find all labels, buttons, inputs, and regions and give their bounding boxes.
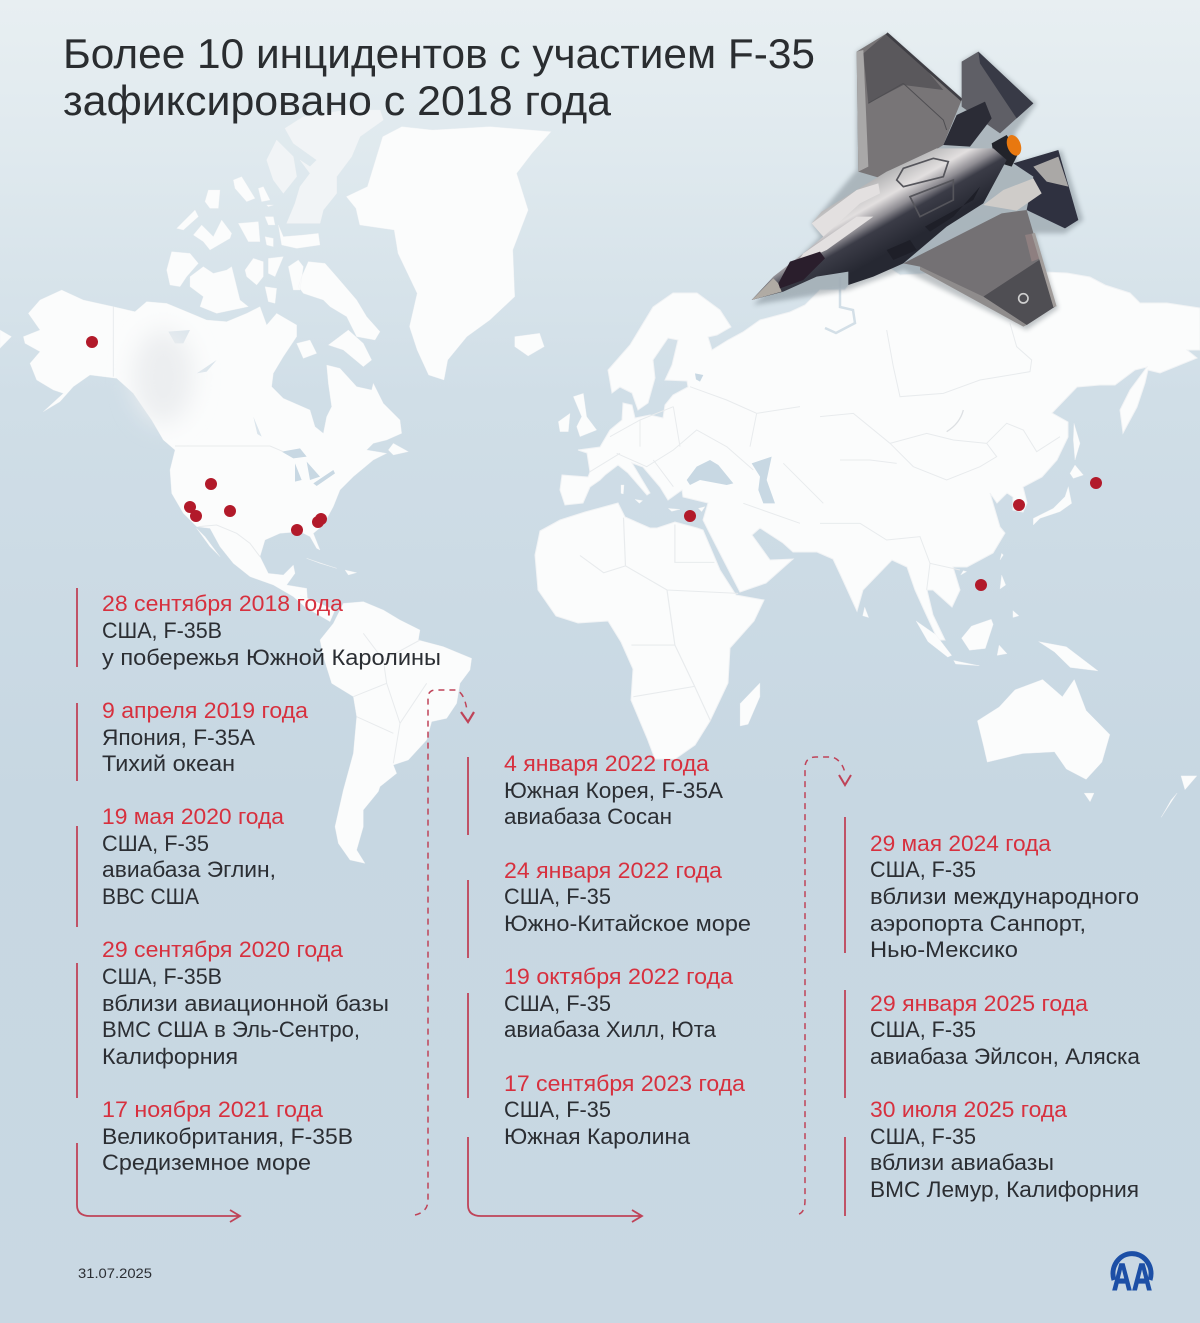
Africa, Oceania and Asian islands [580,518,1197,817]
incident 29.05.2024: 29 мая 2024 года [870,831,1051,856]
South America borders [353,633,427,763]
incident 09.04.2019: Тихий океан [102,751,235,776]
incident 17.09.2023: 17 сентября 2023 года [504,1071,745,1096]
nose [752,278,782,300]
incident 17.09.2023: Южная Каролина [504,1124,690,1149]
incident 29.05.2024: Нью-Мексико [870,937,1018,962]
Canadian peninsula and Southampton [297,330,372,367]
lower wing [903,210,1055,325]
North America [23,290,408,610]
incident 19.10.2022: авиабаза Хилл, Юта [504,1017,716,1042]
European borders [590,387,823,523]
incident 28.09.2018: 28 сентября 2018 года [102,591,343,616]
Canadian Arctic Archipelago [167,110,383,340]
vertical fin upper [943,102,992,147]
Baja California [197,528,220,557]
arrow: column 2 continuation [468,1137,642,1222]
canopy [778,252,825,288]
fuselage [752,148,1007,300]
incident 24.01.2022 [468,858,751,958]
incident 29.01.2025: авиабаза Эйлсон, Аляска [870,1044,1140,1069]
Japan, Sakhalin, Taiwan, Hainan, Luzon [961,423,1083,589]
incident 17.09.2023: США, F-35 [504,1097,611,1122]
arrow: column 1 continuation [77,1143,240,1222]
incident 04.01.2022: Южная Корея, F-35A [504,778,723,803]
title: зафиксировано с 2018 года [63,77,612,124]
Madagascar [740,683,760,726]
incident 19.05.2020: США, F-35 [102,831,209,856]
Chukotka tip [0,330,11,348]
incident 09.04.2019 [77,698,308,781]
incident 29.09.2020: Калифорния [102,1044,238,1069]
incident 17.11.2021 [102,1097,353,1175]
incident location markers [86,336,1102,591]
Ellesmere and Axel Heiberg islands [267,110,383,223]
column 3: incidents [845,817,1140,1216]
incident 29.01.2025: США, F-35 [870,1017,976,1042]
northern Canadian lakes [168,330,262,437]
incident 19.05.2020: ВВС США [102,884,199,909]
Black Sea, Caspian Sea and European details [558,373,823,523]
title: Более 10 инцидентов с участием F-35 [63,30,815,77]
logo: Anadolu Agency [1112,1254,1152,1299]
column 1: incidents [77,588,441,1175]
Newfoundland [388,443,408,455]
incident 19.05.2020 [77,804,284,927]
incident 09.04.2019: 9 апреля 2019 года [102,698,308,723]
Mediterranean islands [621,485,705,512]
Eurasia [560,265,1200,640]
Ob gulf [825,277,855,333]
F-35 jet illustration [752,33,1083,330]
incident 04.01.2022: 4 января 2022 года [504,751,709,776]
Southeast Asia and New Zealand [863,607,1197,817]
incident 04.01.2022 [468,751,723,835]
Australia [977,680,1110,779]
incident 29.05.2024: аэропорта Санпорт, [870,911,1086,936]
Caribbean islands [307,558,357,575]
date: 31.07.2025 [78,1265,152,1281]
incident 30.07.2025 [845,1097,1139,1216]
incident 17.11.2021: Великобритания, F-35B [102,1124,353,1149]
Greenland and North Atlantic islands [0,127,551,380]
incident 17.09.2023 [504,1071,745,1149]
lower tail [1013,150,1078,228]
incident 30.07.2025: США, F-35 [870,1124,976,1149]
incident 19.05.2020: авиабаза Эглин, [102,857,276,882]
dashed arrow to column 2 [415,690,474,1215]
incident 19.10.2022: США, F-35 [504,991,611,1016]
insignia [1019,294,1028,303]
column 2: incidents [468,751,751,1149]
incident 29.05.2024: вблизи международного [870,884,1139,909]
tail fin light [983,178,1042,211]
incident 29.05.2024: США, F-35 [870,857,976,882]
incident 30.07.2025: 30 июля 2025 года [870,1097,1067,1122]
upper wing [857,33,962,180]
incident 29.01.2025: 29 января 2025 года [870,991,1088,1016]
incident 24.01.2022: 24 января 2022 года [504,858,722,883]
North America borders [113,307,283,557]
incident 30.07.2025: вблизи авиабазы [870,1150,1054,1175]
incident 28.09.2018 [77,588,441,670]
incident 29.01.2025 [845,990,1140,1098]
upper tail [962,52,1033,133]
incident 29.05.2024 [845,817,1139,962]
Panama link [300,595,335,622]
incident 19.10.2022: 19 октября 2022 года [504,964,734,989]
incident 29.09.2020: США, F-35B [102,964,222,989]
Great Lakes [282,448,335,486]
jet shadow [753,33,1083,330]
incident 28.09.2018: у побережья Южной Каролины [102,645,441,670]
world map [0,110,1200,863]
forward fuselage highlight [797,183,880,263]
South America [300,595,472,863]
incident 28.09.2018: США, F-35B [102,618,222,643]
incident 24.01.2022: США, F-35 [504,884,611,909]
incident 29.09.2020 [77,937,389,1098]
logo: Anadolu Agency: AA [1112,1257,1152,1299]
Iceland [515,333,544,356]
incident 19.05.2020: 19 мая 2020 года [102,804,284,829]
incident 29.09.2020: ВМС США в Эль-Сентро, [102,1017,360,1042]
fuselage panel details [897,158,953,217]
incident 04.01.2022: авиабаза Сосан [504,804,672,829]
Africa [535,503,764,759]
Asian borders and islands [820,323,1083,590]
African and Arabian borders [580,518,738,721]
title [63,30,815,124]
incident 29.09.2020: 29 сентября 2020 года [102,937,343,962]
incident 30.07.2025: ВМС Лемур, Калифорния [870,1177,1139,1202]
incident 17.11.2021: 17 ноября 2021 года [102,1097,323,1122]
British Isles [558,393,597,437]
incident 17.11.2021: Средиземное море [102,1150,311,1175]
engine nozzle [992,135,1018,167]
incident 19.10.2022 [468,964,734,1098]
incident 29.09.2020: вблизи авиационной базы [102,991,389,1016]
incident 24.01.2022: Южно-Китайское море [504,911,751,936]
dashed arrow to column 3 [799,757,851,1214]
soft relief over western Canada [133,330,193,423]
incident 09.04.2019: Япония, F-35A [102,725,255,750]
